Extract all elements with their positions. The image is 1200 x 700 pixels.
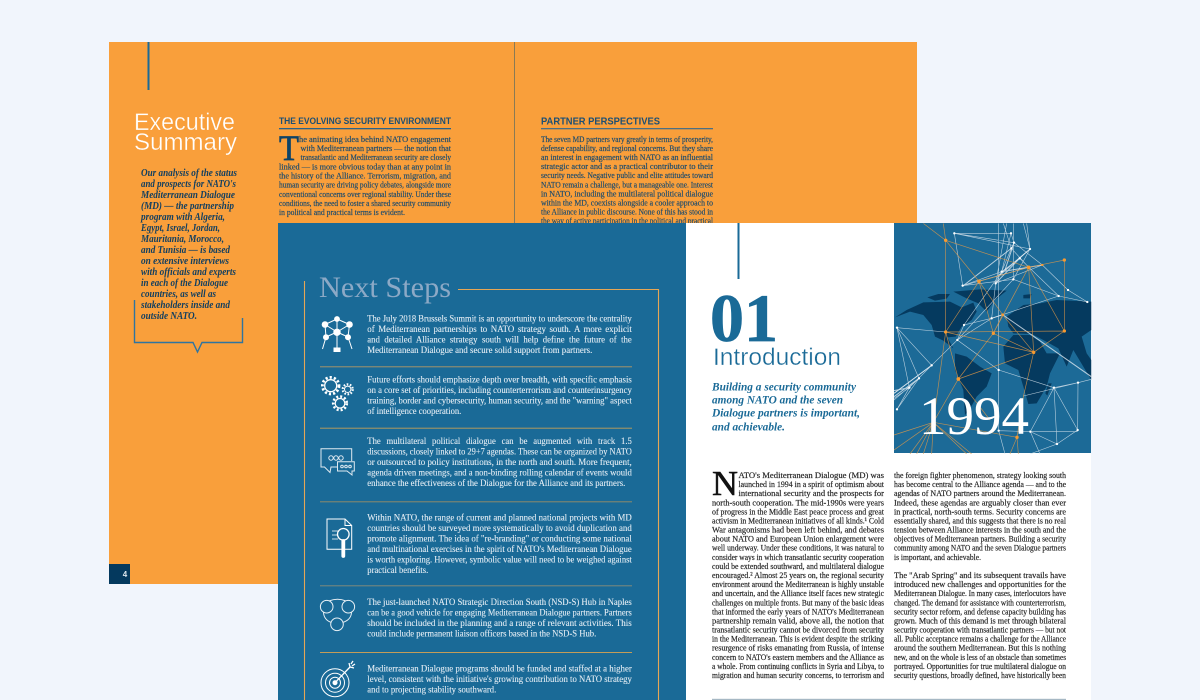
text block: step 6: Mediterranean Dialogue programs should be funded and staffed at a higher <box>367 664 633 674</box>
section: partner perspectives: security needs. Negative public and elite attitudes toward <box>541 170 714 180</box>
text block: executive summary introduction: Egypt, Israel, Jordan, <box>140 223 220 234</box>
section: partner perspectives: PARTNER PERSPECTIVES <box>541 116 660 128</box>
text block: introduction column 1: resurgence of risks emanating from Russia, of intense <box>712 643 884 653</box>
heading: Introduction: Introduction <box>713 344 841 371</box>
text block: step 5: The just-launched NATO Strategic Direction South (NSD-S) Hub in Naples <box>367 597 632 608</box>
section: the evolving security environment: with Mediterranean partners — the notion that <box>300 143 452 153</box>
icon: atomium <box>322 317 352 352</box>
text block: introduction column 2: security sector reform, and defense capacity building has <box>894 606 1066 616</box>
text block: introduction column 2: tension between Alliance interests in the south and the <box>894 524 1066 534</box>
text block: introduction column 1: a whole. From continuing conflicts in Syria and Libya, to <box>712 661 884 671</box>
text block: executive summary introduction: stakeholders inside and <box>140 300 231 311</box>
text block: introduction column 1: could be extended southward, and multilateral dialogue <box>712 561 884 571</box>
subheading: pull quote: Dialogue partners is important, <box>711 406 860 420</box>
text block: introduction column 2: is important, and achievable. <box>894 552 981 562</box>
text block: introduction column 1: environment around the Mediterranean is highly unstable <box>712 579 884 589</box>
text block: introduction column 2: in practical, north-south terms. Security concerns are <box>894 506 1066 516</box>
frame <box>304 281 658 700</box>
text block: introduction column 1: that informed the early years of NATO's Mediterranean <box>712 606 885 616</box>
text block: introduction column 2: all. Public acceptance remains a challenge for the Alliance <box>894 634 1066 644</box>
text block: introduction column 1: challenges on multiple fronts. But many of the basic ideas <box>712 597 884 607</box>
text block: executive summary introduction: Mediterranean Dialogue <box>140 190 235 201</box>
subheading: pull quote: Building a security community <box>711 380 857 394</box>
section: the evolving security environment: transatlantic and Mediterranean security are closely <box>300 152 452 162</box>
section: the evolving security environment <box>279 116 452 217</box>
map: continents <box>895 289 1091 415</box>
panel: introduction white page <box>686 223 1091 700</box>
network: orange lines <box>894 223 1064 454</box>
text block: introduction column 2: The "Arab Spring" and its subsequent travails have <box>894 570 1066 580</box>
image: world map with network and 1994 <box>894 223 1091 454</box>
text block: introduction column 2: new, and on the whole is less of an obstacle than sometimes <box>894 652 1066 662</box>
text block: step 3: enhance the effectiveness of the Dialogue for the Alliance and its partners. <box>367 478 625 489</box>
text block: executive summary introduction: countries, as well as <box>141 289 216 300</box>
text block: executive summary introduction: on extensive interviews <box>141 256 229 267</box>
text block: step 1 <box>367 314 632 356</box>
text block: executive summary introduction: with officials and experts <box>141 267 236 278</box>
section: partner perspectives: strategic actor and as a practical contributor to their <box>541 161 713 171</box>
text block: step 3: The multilateral political dialogue can be augmented with track 1.5 <box>367 436 632 447</box>
text block: introduction column 1: well underway. Under these conditions, it was natural to <box>712 543 884 553</box>
text block: executive summary introduction: Our analysis of the status <box>141 168 237 179</box>
icon: gears <box>322 377 353 410</box>
text block: step 2: Future efforts should emphasize depth over breadth, with specific emphasis <box>367 374 632 386</box>
section: the evolving security environment: human security are driving policy debates, alongside more <box>279 180 451 190</box>
text block: step 4: countries should be surveyed more systematically to avoid duplication and <box>367 523 632 534</box>
section: partner perspectives: within the MD, coexists alongside a cooler approach to <box>541 198 713 208</box>
section: partner perspectives: in NATO, including the multilateral political dialogue <box>541 188 713 198</box>
text block: introduction column 2: around the southern Mediterranean. But this is nothing <box>894 643 1067 653</box>
text block: executive summary introduction: outside NATO. <box>141 311 197 322</box>
text block: step 5: should be included in the planning and a range of relevant activities. This <box>367 618 632 629</box>
text block: introduction column 1: migration and human security concerns, to terrorism and <box>712 670 885 680</box>
panel: next steps blue page <box>278 223 686 700</box>
text block: introduction column 2: introduced new challenges and opportunities for the <box>894 579 1066 589</box>
text block: introduction column 1: transatlantic security cannot be divorced from security <box>712 624 885 634</box>
text block: step 1: The July 2018 Brussels Summit is an opportunity to underscore the centrality <box>367 314 632 324</box>
icon: speech bubbles <box>321 449 354 475</box>
text block: step 4: promote alignment. The idea of "re-branding" or conducting some national <box>367 534 632 544</box>
subheading: pull quote: and achievable. <box>712 420 785 434</box>
text block: step 3: agenda driven meetings, and a non-binding rolling calendar of events would <box>367 468 632 478</box>
subheading: pull quote <box>711 380 860 434</box>
page number: 4 <box>123 570 128 579</box>
text block: introduction column 2 <box>894 470 1067 680</box>
text block: introduction column 1: N <box>712 464 738 503</box>
text block: step 6: and to projecting stability southward. <box>367 684 496 696</box>
network: white lines <box>894 223 1091 454</box>
text block: executive summary introduction: Mauritania, Morocco, <box>140 234 224 245</box>
text block: step 4: Within NATO, the range of current and planned national projects with MD <box>367 512 632 524</box>
heading: Executive Summary <box>134 109 238 156</box>
text block: introduction column 2: grown. Much of this demand is met through bilateral <box>894 616 1067 626</box>
subheading: pull quote: among NATO and the seven <box>712 394 843 406</box>
text block: step 4: is worth exploring. However, symbolic value will need to be weighed against <box>367 554 632 566</box>
text block: step 3 <box>367 436 632 489</box>
text block: step 2 <box>367 374 632 417</box>
text block: introduction column 2: objectives of Mediterranean partners. Building a security <box>894 534 1067 544</box>
text block: step 2: of intelligence cooperation. <box>367 406 461 417</box>
section: partner perspectives: the way of active participation in the political and practical <box>541 216 714 226</box>
section: the evolving security environment: he animating idea behind NATO engagement <box>299 134 452 144</box>
text block: introduction column 1 <box>712 464 885 680</box>
section: partner perspectives: an interest in engagement with NATO as an influential <box>541 152 714 162</box>
text block: introduction column 1: ATO's Mediterranean Dialogue (MD) was <box>738 470 884 480</box>
text block: introduction column 2: essentially shared, and this suggests that there is no real <box>894 516 1067 526</box>
text block: introduction column 1: international security and the prospects for <box>738 488 884 498</box>
callout bracket <box>134 300 242 352</box>
text block: executive summary introduction: and prospects for NATO's <box>141 179 236 190</box>
heading: Next Steps: Next Steps <box>319 271 451 304</box>
text block: introduction column 2: the foreign fighter phenomenon, strategy looking south <box>894 470 1067 480</box>
text block: introduction column 1: in the Mediterranean. This is evident despite the striking <box>712 634 885 644</box>
icon: target with arrow <box>321 661 355 697</box>
text block: step 4: and multinational exercises in the spirit of NATO's Mediterranean Dialogue <box>367 544 632 555</box>
icon: three connected circles <box>320 599 355 631</box>
section: the evolving security environment: the history of the Alliance. Terrorism, migration, and <box>279 170 452 180</box>
section: partner perspectives: NATO remain a challenge, but a manageable one. Interest <box>541 179 714 189</box>
text block: introduction column 1: launched in 1994 in a spirit of optimism about <box>738 479 885 489</box>
text block: step 2: on a core set of priorities, including counterterrorism and counterinsurgency <box>367 385 632 396</box>
text block: introduction column 1: about NATO and European Union enlargement were <box>712 534 884 544</box>
section: partner perspectives: The seven MD partners vary greatly in terms of prosperity, <box>541 134 713 144</box>
text block: introduction column 1: of progress in the Middle East peace process and great <box>712 506 885 516</box>
text block: step 6: level, consistent with the initiative's growing contribution to NATO strategy <box>367 674 632 685</box>
text block: introduction column 2: agendas of NATO partners around the Mediterranean. <box>894 488 1066 498</box>
text block: step 4: practical benefits. <box>367 565 428 576</box>
text block: step 3: discussions, closely linked to 29+7 agendas. These can be organized by NATO <box>367 446 632 458</box>
text block: introduction column 2: Indeed, these agendas are arguably closer than ever <box>894 497 1066 507</box>
page number <box>109 564 130 584</box>
section: the evolving security environment: conventional concerns over regional stability. Under these <box>279 189 451 199</box>
text block: step 3: or outsourced to policy institutions, in the north and south. More frequent, <box>367 457 632 468</box>
text block: executive summary introduction: (MD) — the partnership <box>141 201 234 212</box>
text block: introduction column 2: security questions, broadly defined, have historically been <box>894 670 1067 680</box>
text block: introduction column 2: Mediterranean Dialogue. In many cases, interlocutors have <box>894 588 1066 598</box>
text block: executive summary introduction: and Tunisia — is based <box>141 245 231 256</box>
heading: Executive Summary: Summary <box>134 129 238 156</box>
text block: introduction column 1: partnership remain valid, above all, the notion that <box>712 616 885 626</box>
text block: introduction column 1: concern to NATO's eastern members and the Alliance as <box>712 652 884 662</box>
text block: step 5: can be a good vehicle for engaging Mediterranean Dialogue partners. Partners <box>367 608 632 618</box>
text block: introduction column 2: has become central to the Alliance agenda — and to the <box>894 479 1066 489</box>
text block: executive summary introduction: program with Algeria, <box>140 212 225 223</box>
section: partner perspectives: the Alliance in public discourse. None of this has stood in <box>541 207 714 217</box>
section: the evolving security environment: in political and practical terms is evident. <box>279 207 405 217</box>
heading: Executive Summary: Executive <box>134 109 235 136</box>
text block: step 1: and detailed Alliance strategy south will help define the future of the <box>367 334 632 346</box>
text block: introduction column 1: north-south cooperation. The mid-1990s were years <box>712 497 884 507</box>
text block: introduction column 1: War antagonisms had been left behind, and debates <box>712 524 884 534</box>
text block: step 6 <box>367 664 633 696</box>
section: the evolving security environment: THE EVOLVING SECURITY ENVIRONMENT <box>279 116 451 126</box>
text block: step 1: Mediterranean Dialogue and secure solid support from partners. <box>367 345 592 356</box>
text block: introduction column 1: activism in Mediterranean initiatives of all kinds.¹ Cold <box>712 516 885 526</box>
text block: introduction column 1: consider ways in which transatlantic security cooperation <box>712 552 885 562</box>
label: 1994: 1994 <box>919 386 1029 446</box>
section: partner perspectives <box>541 116 714 226</box>
text block: introduction column 2: community among NATO and the seven Dialogue partners <box>894 543 1066 553</box>
text block: introduction column 2: changed. The demand for assistance with counterterrorism, <box>894 597 1066 607</box>
text block: introduction column 1: encouraged.² Almost 25 years on, the regional security <box>712 570 885 580</box>
text block: step 2: training, border and cybersecurity, human security, and the "warning" aspect <box>367 396 632 406</box>
text block: step 4 <box>367 512 632 576</box>
section: the evolving security environment: linked — is more obvious today than at any point in <box>279 161 452 171</box>
text block: step 1: of Mediterranean partnerships to NATO strategy south. A more explicit <box>367 324 632 335</box>
icon: document with magnifying glass <box>327 519 352 556</box>
text block: executive summary introduction: in each of the Dialogue <box>141 278 228 289</box>
heading: 01: 01 <box>710 280 778 356</box>
text block: introduction column 2: security cooperation with transatlantic partners — but not <box>894 624 1067 634</box>
section: partner perspectives: defense capability, and regional concerns. But they share <box>541 143 713 153</box>
text block: introduction column 2: portrayed. Opportunities for true multilateral dialogue on <box>894 661 1067 671</box>
text block: step 5 <box>367 597 632 640</box>
section: the evolving security environment: T <box>279 128 299 168</box>
text block: step 5: could include permanent liaison officers based in the NSD-S Hub. <box>367 628 596 640</box>
text block: introduction column 1: and uncertain, and the Alliance itself faces new strategic <box>712 588 884 598</box>
text block: executive summary introduction <box>140 168 237 322</box>
panel: executive summary orange spread <box>109 42 917 584</box>
section: the evolving security environment: conditions, the need to foster a shared security community <box>279 198 452 208</box>
